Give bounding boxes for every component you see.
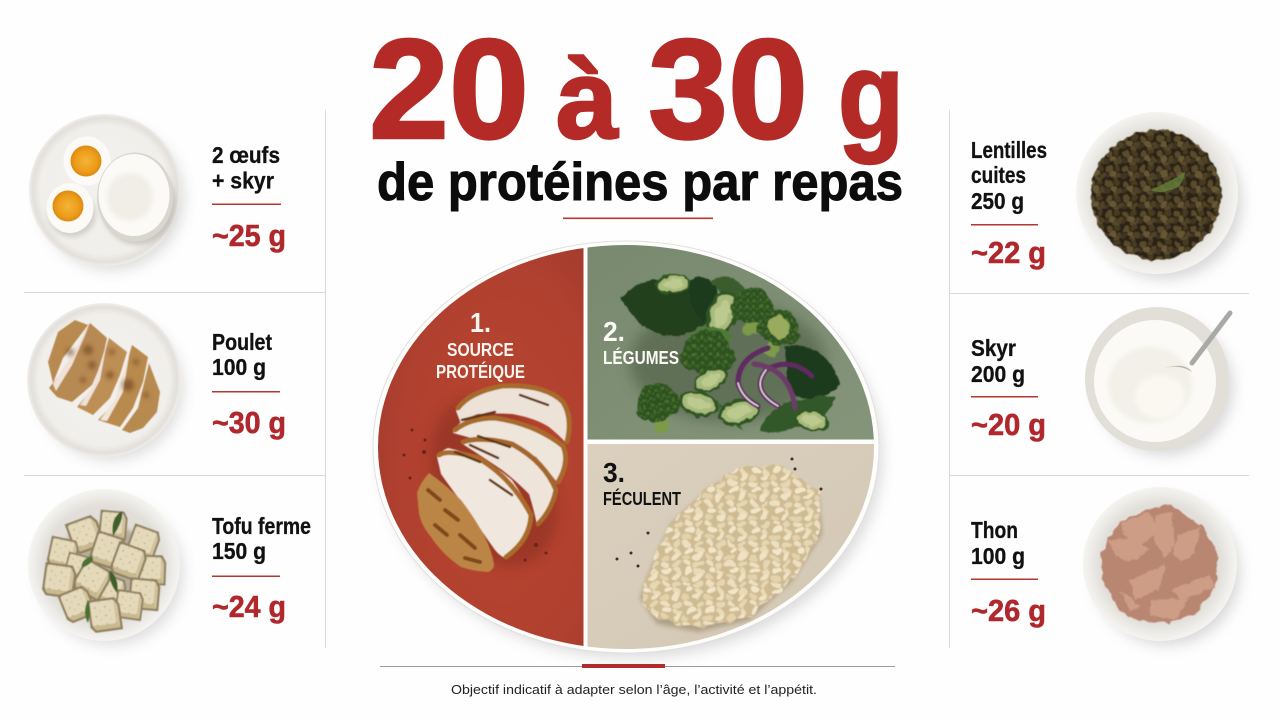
text: eggs and skyr: + skyr	[212, 168, 274, 194]
label: protein source: 1.	[470, 307, 491, 338]
text: tuna: ~26 g	[971, 593, 1046, 628]
text: tofu: Tofu ferme	[212, 513, 311, 539]
text: lentils: Lentilles	[971, 137, 1047, 163]
icon: rice	[640, 466, 822, 632]
label: vegetables: 2.	[603, 316, 625, 347]
text: lentils	[971, 137, 1047, 270]
icon: bowl of lentils	[1076, 112, 1242, 279]
icon: pepper flakes	[402, 428, 548, 562]
panel: protein section	[370, 240, 584, 655]
label: starch: 3.	[603, 457, 625, 488]
title: 20 à 30 g: g	[838, 28, 904, 165]
label: vegetables	[603, 316, 679, 368]
label: starch	[603, 457, 681, 509]
text: eggs and skyr: ~25 g	[212, 218, 286, 253]
panel: left column of protein examples	[24, 110, 326, 648]
icon: green vegetables	[620, 272, 840, 439]
icon: plate with sliced chicken	[27, 303, 183, 460]
panel: vegetable section	[588, 240, 882, 440]
text: chicken: ~30 g	[212, 405, 286, 440]
subtitle: de protéines par repas	[377, 153, 903, 212]
label: starch: FÉCULENT	[603, 488, 681, 509]
panel: right column of protein examples	[949, 110, 1249, 648]
icon: bowl of tuna	[1083, 487, 1240, 645]
footer rule	[380, 664, 895, 668]
title: 20 à 30 g: à	[556, 37, 619, 162]
label: protein source	[436, 307, 525, 382]
icon: chicken grill marks	[66, 345, 149, 398]
title: 20 à 30 g	[369, 10, 904, 169]
label: protein source: SOURCE	[447, 340, 514, 360]
icon: plate of firm tofu	[28, 489, 183, 645]
text: tofu: ~24 g	[212, 589, 286, 624]
text: chicken: Poulet	[212, 329, 272, 355]
text: skyr: ~20 g	[971, 407, 1046, 442]
text: tuna: 100 g	[971, 543, 1025, 569]
text: chicken: 100 g	[212, 354, 266, 380]
text: tofu: 150 g	[212, 538, 266, 564]
text: tuna	[971, 517, 1046, 628]
icon: bowl of skyr with spoon	[1085, 307, 1233, 455]
panel: starch section	[588, 444, 882, 659]
icon: pepper specks	[616, 458, 822, 568]
text: chicken	[212, 329, 286, 440]
label: protein source: PROTÉIQUE	[436, 361, 525, 382]
text: skyr	[971, 335, 1046, 442]
text: lentils: cuites	[971, 162, 1026, 188]
text: skyr: Skyr	[971, 335, 1016, 361]
title: 20 à 30 g: 30	[648, 10, 808, 169]
text: lentils: ~22 g	[971, 235, 1046, 270]
footer note: Objectif indicatif à adapter selon l’âge, l’activité et l’appétit.	[451, 682, 817, 697]
text: lentils: 250 g	[971, 188, 1024, 214]
text: eggs and skyr	[212, 142, 286, 253]
icon: plate with eggs and skyr	[29, 114, 184, 270]
label: vegetables: LÉGUMES	[603, 347, 679, 368]
text: eggs and skyr: 2 œufs	[212, 142, 280, 168]
chart: divided meal plate	[370, 240, 882, 659]
icon: sliced chicken breast	[407, 379, 581, 585]
text: tofu	[212, 513, 311, 624]
text: tuna: Thon	[971, 517, 1018, 543]
text: skyr: 200 g	[971, 361, 1025, 387]
title underline	[563, 218, 713, 219]
title: 20 à 30 g: 20	[369, 10, 529, 169]
